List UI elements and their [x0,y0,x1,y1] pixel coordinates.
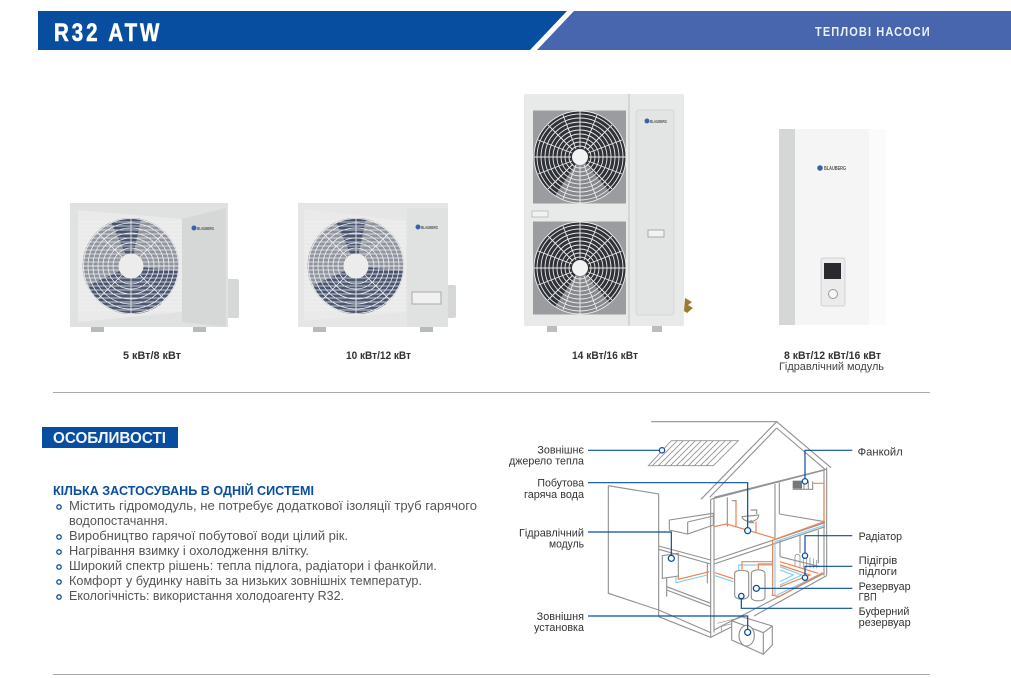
features text block [53,483,477,603]
logo [192,226,214,231]
label: underfloor heating: підлоги [859,566,897,578]
label: domestic hot water: Побутова [537,478,585,490]
bullet list: водопостачання. [69,513,168,528]
label: buffer tank [859,606,911,629]
hydraulic module box [662,553,678,597]
callout lines and markers [588,448,852,635]
caption: hydraulic module: Гідравлічний модуль [779,361,884,373]
category label: ТЕПЛОВІ НАСОСИ [815,24,931,39]
logo [644,118,667,124]
label: outdoor unit: Зовнішня [537,611,584,623]
bullet list: Екологічність: використання холодоагенту R32. [69,588,344,603]
fan coil [793,481,813,489]
section heading: features: ОСОБЛИВОСТІ [53,430,166,447]
outdoor unit [732,617,772,654]
solar collector [648,441,738,466]
caption: hydraulic module: 8 кВт/12 кВт/16 кВт [784,350,882,362]
label: outdoor unit [534,611,585,634]
product: outdoor unit 10/12 kW [298,203,456,332]
label: underfloor heating [859,555,897,578]
bullet list: Містить гідромодуль, не потребує додаткової ізоляції труб гарячого [69,498,477,513]
house outline [608,422,831,637]
label: radiator: Радіатор [859,531,902,543]
label: external heat source [509,444,585,467]
logo: BLAUBERG [824,166,846,172]
label: outdoor unit: установка [534,622,585,634]
bullet list: Комфорт у будинку навіть за низьких зовнішніх температур. [69,573,422,588]
label: DHW tank: Резервуар [859,581,911,593]
bullet list: Нагрівання взимку і охолодження влітку. [69,543,309,558]
label: buffer tank: Буферний [859,606,909,618]
label: DHW tank: ГВП [859,592,877,604]
product: outdoor unit 14/16 kW [524,94,693,332]
label: domestic hot water [524,478,585,501]
tanks [735,570,765,601]
label: domestic hot water: гаряча вода [524,489,585,501]
logo: BLAUBERG [197,226,214,231]
product: hydraulic module [779,129,886,325]
label: hydraulic module: Гідравлічний [519,528,584,540]
label: underfloor heating: Підігрів [859,555,897,567]
label: buffer tank: резервуар [859,617,911,629]
label: external heat source: джерело тепла [509,455,585,467]
bullet list: Широкий спектр рішень: тепла підлога, радіатори і фанкойли. [69,558,437,573]
header band [38,11,1011,50]
radiator [795,554,817,568]
subheading: КІЛЬКА ЗАСТОСУВАНЬ В ОДНІЙ СИСТЕМІ [53,483,314,498]
label: DHW tank [859,581,911,604]
logo: BLAUBERG [421,225,438,230]
heating pipes [676,483,825,597]
bullet list: Виробництво гарячої побутової води цілий рік. [69,528,348,543]
caption: 5/8 kW: 5 кВт/8 кВт [123,350,182,362]
label: fan coil: Фанкойл [858,447,903,459]
caption: 14/16 kW: 14 кВт/16 кВт [572,350,639,362]
bullet list [57,498,477,603]
label: external heat source: Зовнішнє [537,444,584,456]
product: outdoor unit 5/8 kW [70,203,239,332]
section heading: features [42,427,178,448]
title: R32 ATW [54,18,162,46]
caption: hydraulic module [779,350,884,373]
logo [817,165,846,172]
label: hydraulic module: модуль [549,539,584,551]
caption: 10/12 kW: 10 кВт/12 кВт [346,350,412,362]
house system diagram [509,422,911,654]
logo: BLAUBERG [650,119,667,124]
label: hydraulic module [519,528,584,551]
logo [416,224,438,230]
